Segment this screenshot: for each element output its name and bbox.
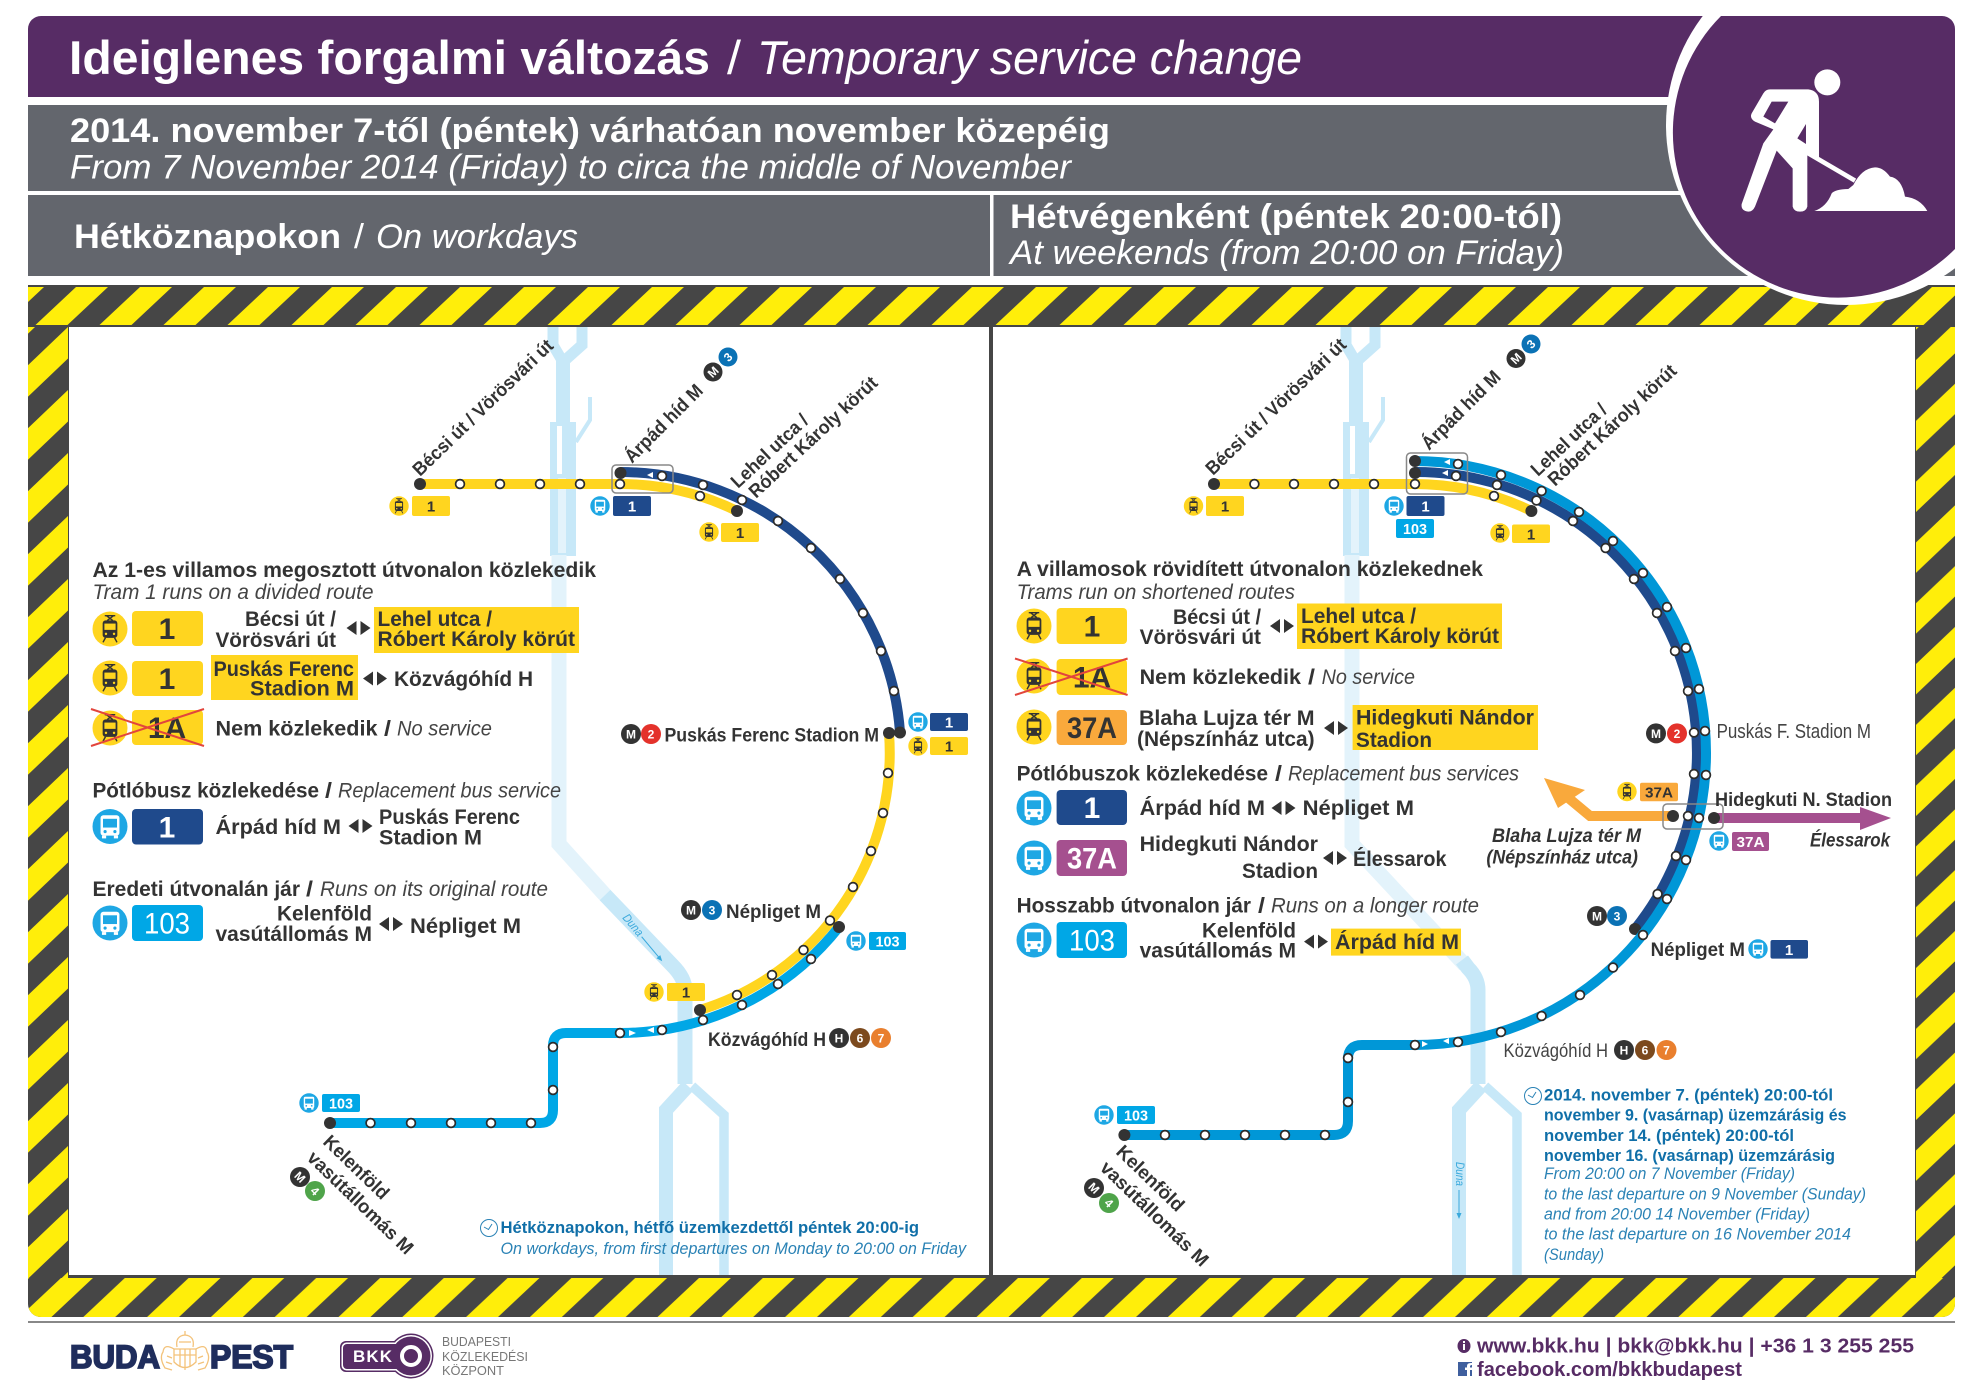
contact info: [1458, 1336, 1914, 1381]
legend row: tram 37A: [1016, 705, 1538, 752]
weekend heading band: Hétvégenként (péntek 20:00-tól): [1010, 198, 1562, 236]
legend row: bus 103 left: Kelenföld: [277, 902, 372, 926]
legend row: tram 1 Puskás to Közvágóhíd: 1: [159, 663, 175, 696]
footer rule: [28, 1321, 1955, 1323]
note: weekend validity: [1524, 1086, 1866, 1264]
tag: bus 37A: [1709, 831, 1769, 851]
tag: bus 103 Kelenföld: [299, 1093, 360, 1113]
label: Duna: [620, 911, 668, 965]
date English: From 7 November 2014 (Friday) to circa the middle of November: [70, 149, 1073, 187]
legend row: tram 1A no service right: /: [1308, 666, 1315, 689]
legend row: tram 1 Bécsi út to Lehel utca: [92, 607, 579, 653]
logo: Budapest: PEST: [210, 1339, 293, 1375]
legend: left replacement bus heading: Replacement bus service: [338, 780, 561, 802]
legend: right tram heading: [1017, 558, 1483, 604]
tag: bus 1 Árpád híd: 1: [628, 498, 636, 516]
legend row: tram 1A no service: Nem közlekedik: [216, 718, 378, 741]
legend row: tram 1 right: Róbert Károly körút: [1301, 625, 1499, 648]
label: Közvágóhíd right: H: [1620, 1044, 1628, 1058]
label: Népliget left: Népliget M: [726, 902, 821, 923]
icon: metro 4 Kelenföld left: M: [291, 1169, 308, 1186]
label: Árpád híd right: Árpád híd M: [1417, 366, 1505, 455]
label: Puskás Ferenc Stadion: M: [626, 728, 636, 742]
label: Élessarok: Élessarok: [1810, 830, 1891, 852]
legend: left tram heading: Tram 1 runs on a divided route: [92, 581, 374, 604]
legend row: tram 1 Bécsi út to Lehel utca: 1: [159, 613, 175, 646]
note: weekend validity: november 14. (péntek) 20:00-tól: [1544, 1126, 1794, 1145]
icon: metro 3 Árpád híd right: [1506, 334, 1540, 368]
label: Blaha Lujza tér: [1486, 826, 1642, 869]
tag: bus 103 Kelenföld right: [1094, 1105, 1155, 1125]
legend row: bus 1 right: [1016, 790, 1414, 826]
icon: crest: [161, 1331, 209, 1370]
label: Népliget left: [681, 900, 821, 923]
left map: tram 1 southern section: [694, 505, 895, 1016]
tag: bus 103 Kelenföld: 103: [329, 1096, 353, 1112]
label: Puskás Ferenc Stadion: 2: [648, 728, 655, 742]
legend row: bus 1: Árpád híd M: [216, 816, 341, 839]
workday heading band: Hétköznapokon: [74, 218, 341, 256]
icon: metro 4 Kelenföld right: 4: [1102, 1196, 1116, 1211]
label: Lehel utca left: Lehel utca /: [727, 410, 814, 493]
right map: river Danube: [1343, 327, 1517, 1275]
legend row: tram 1 Puskás to Közvágóhíd: Közvágóhíd H: [394, 668, 533, 691]
legend: left replacement bus heading: /: [325, 780, 332, 802]
legend row: bus 1 right: Árpád híd M: [1140, 797, 1265, 820]
tag: tram 1 Puskás: [908, 736, 968, 756]
left map: tram 1 northern section: [414, 478, 737, 511]
tag: tram 1 Puskás: 1: [945, 738, 953, 756]
label: Közvágóhíd left: H: [835, 1032, 843, 1046]
note: weekend validity: 2014. november 7. (péntek) 20:00-tól: [1544, 1086, 1833, 1104]
legend row: bus 1 right: 1: [1084, 792, 1100, 825]
legend row: bus 37A: [1016, 833, 1447, 883]
legend row: tram 1A no service right: 1A: [1073, 662, 1111, 694]
right map: arrow to Blaha Lujza tér: [1544, 778, 1673, 816]
legend row: tram 1 Puskás to Közvágóhíd: Stadion M: [250, 678, 354, 700]
legend row: bus 1 right: Népliget M: [1303, 797, 1414, 820]
legend row: tram 1 right: Bécsi út /: [1173, 606, 1261, 629]
legend row: bus 1: Puskás Ferenc: [379, 806, 520, 829]
label: Közvágóhíd right: Közvágóhíd H: [1504, 1041, 1608, 1062]
tag: tram 1 Közvágóhíd: 1: [682, 984, 690, 1002]
label: Lehel utca left: Róbert Károly körút: [745, 372, 883, 503]
label: Közvágóhíd left: 7: [878, 1032, 885, 1046]
label: Bécsi út left: Bécsi út / Vörösvári út: [409, 335, 558, 481]
note: weekend validity: to the last departure on 9 November (Sunday): [1544, 1184, 1866, 1203]
logo: BKK: [340, 1334, 434, 1378]
note: weekend validity: (Sunday): [1544, 1245, 1604, 1264]
legend row: tram 1A no service: 1A: [148, 712, 186, 745]
legend: right replacement bus heading: /: [1275, 762, 1282, 785]
contact info: facebook.com/bkkbudapest: [1477, 1359, 1742, 1381]
title separator: /: [727, 31, 742, 84]
legend: left original route heading: Runs on its original route: [320, 878, 548, 901]
icon: metro 3 Árpád híd left: M: [705, 364, 722, 381]
title Hungarian: Ideiglenes forgalmi változás: [69, 31, 710, 84]
label: Puskás F. Stadion: [1646, 721, 1871, 743]
legend: right replacement bus heading: Replacement bus services: [1288, 762, 1519, 785]
label: Lehel utca right: Róbert Károly körút: [1544, 360, 1682, 491]
label: Népliget right: Népliget M: [1651, 940, 1745, 961]
note: weekend validity: november 16. (vasárnap) üzemzárásig: [1544, 1146, 1835, 1165]
header band: title: [28, 16, 1955, 97]
legend row: bus 1: [92, 806, 520, 850]
legend row: tram 1A no service: No service: [397, 718, 492, 741]
label: Lehel utca right: Lehel utca /: [1527, 399, 1612, 481]
legend: left original route heading: [92, 878, 548, 901]
icon: worker shoveling: [1742, 69, 1927, 212]
left map: river Danube: [550, 327, 724, 1275]
right map: bus 103 extended line: [1118, 455, 1710, 1141]
label: Blaha Lujza tér: Blaha Lujza tér M: [1492, 826, 1642, 847]
legend: left tram heading: [92, 559, 596, 604]
tag: tram 37A: 37A: [1645, 784, 1673, 802]
text: BKK full name: KÖZLEKEDÉSI: [442, 1349, 528, 1364]
text: BKK full name: BUDAPESTI: [442, 1334, 511, 1349]
date Hungarian: 2014. november 7-től (péntek) várhatóan november közepéig: [70, 112, 1110, 150]
legend: left replacement bus heading: Pótlóbusz közlekedése: [92, 780, 319, 802]
legend row: tram 37A: 37A: [1067, 712, 1117, 745]
tag: bus 103 Népliget: [846, 931, 906, 951]
tag: bus 103 Kelenföld right: 103: [1124, 1108, 1148, 1124]
label: Közvágóhíd left: [708, 1028, 891, 1051]
label: Népliget right: 3: [1614, 910, 1621, 924]
tag: bus 1 Árpád híd: [590, 496, 651, 516]
hazard stripe frame: [28, 285, 1955, 1317]
tag: tram 1 Lehel utca: [699, 522, 759, 542]
tag: tram 1 Lehel utca: 1: [736, 525, 744, 542]
right map: tram 1 line: [1208, 478, 1531, 511]
icon: metro 4 Kelenföld right: M: [1085, 1180, 1102, 1197]
legend: right longer route heading: Runs on a longer route: [1271, 894, 1479, 918]
icon: metro 3 Árpád híd right: 3: [1524, 337, 1539, 351]
label: Közvágóhíd right: 7: [1663, 1044, 1670, 1058]
icon: metro 3 Árpád híd right: M: [1508, 350, 1525, 367]
weekend heading band: [994, 195, 1955, 276]
title English: Temporary service change: [757, 31, 1302, 84]
legend row: bus 103 left: Népliget M: [410, 915, 521, 938]
label: Kelenföld right: Kelenföld: [1112, 1141, 1188, 1216]
tag: bus 1 Puskás: 1: [945, 714, 953, 732]
tag: bus 37A: 37A: [1736, 834, 1765, 851]
legend row: tram 37A: (Népszínház utca): [1137, 728, 1315, 751]
legend row: tram 1 Bécsi út to Lehel utca: Róbert Károly körút: [378, 628, 575, 651]
label: Puskás F. Stadion: Puskás F. Stadion M: [1717, 721, 1871, 743]
legend row: bus 1: 1: [159, 812, 175, 844]
label: Kelenföld left: vasútállomás M: [303, 1147, 417, 1259]
legend: right tram heading: Trams run on shortened routes: [1017, 581, 1295, 604]
contact info: www.bkk.hu | bkk@bkk.hu | +36 1 3 255 255: [1476, 1336, 1914, 1358]
tag: tram 37A: [1617, 782, 1678, 802]
left map: replacement bus 1 line: [614, 467, 906, 738]
logo: Budapest: BUDA: [70, 1339, 160, 1375]
tag: tram 1 Közvágóhíd: [644, 982, 705, 1002]
note: weekend validity: november 9. (vasárnap) üzemzárásig és: [1544, 1106, 1846, 1125]
legend: right longer route heading: Hosszabb útvonalon jár: [1017, 894, 1251, 918]
text: BKK full name: KÖZPONT: [442, 1363, 504, 1378]
legend: right longer route heading: [1017, 894, 1479, 918]
legend: right longer route heading: /: [1258, 894, 1265, 918]
text: BKK full name: [442, 1334, 528, 1378]
label: Közvágóhíd left: Közvágóhíd H: [708, 1030, 826, 1051]
legend row: bus 37A: Hidegkuti Nándor: [1140, 833, 1318, 856]
panel: weekends: [993, 327, 1915, 1275]
legend row: bus 37A: Élessarok: [1353, 848, 1447, 871]
right map: transfer box stadion: [1663, 804, 1723, 829]
tag: bus 1 and 103 Árpád híd right: 1: [1421, 498, 1430, 516]
legend row: bus 103 right: Kelenföld: [1202, 920, 1296, 942]
label: Puskás Ferenc Stadion: Puskás Ferenc Stadion M: [664, 726, 879, 746]
note: workday validity: Hétköznapokon, hétfő üzemkezdettől péntek 20:00-ig: [500, 1218, 919, 1237]
label: Népliget right: [1587, 906, 1808, 961]
legend row: tram 37A: Hidegkuti Nándor: [1356, 706, 1534, 730]
legend row: tram 1A no service right: Nem közlekedik: [1140, 666, 1301, 689]
date band: [28, 105, 1955, 191]
legend row: tram 1A no service right: [1015, 658, 1415, 695]
legend row: bus 37A: 37A: [1067, 842, 1117, 876]
panel: workdays: [69, 327, 989, 1275]
right map: transfer box north: [1406, 453, 1468, 494]
icon: facebook: [1458, 1362, 1472, 1376]
tag: tram 1 Lehel utca right: [1490, 523, 1550, 544]
label: Népliget right: M: [1592, 910, 1602, 924]
workday heading band: On workdays: [376, 218, 578, 256]
workday heading band: [28, 195, 990, 276]
label: Bécsi út right: Bécsi út / Vörösvári út: [1202, 334, 1351, 480]
legend row: tram 1 Bécsi út to Lehel utca: Bécsi út /: [245, 608, 336, 631]
note: weekend validity: From 20:00 on 7 November (Friday): [1544, 1164, 1795, 1183]
tag: bus 1 and 103 Árpád híd right: 103: [1403, 521, 1427, 538]
logo: BKK: BKK: [353, 1347, 393, 1366]
legend row: tram 1 Puskás to Közvágóhíd: Puskás Ferenc: [214, 658, 354, 681]
legend row: bus 37A: Stadion: [1242, 860, 1318, 883]
icon: metro 3 Árpád híd left: 3: [721, 350, 736, 364]
icon: info: [1458, 1339, 1470, 1353]
left map: bus 103 line: [324, 921, 845, 1129]
tag: tram 1 Bécsi út right: [1184, 496, 1244, 516]
label: Közvágóhíd left: 6: [857, 1032, 864, 1046]
legend row: tram 1 Bécsi út to Lehel utca: Lehel utca /: [378, 608, 492, 631]
workday heading band: /: [354, 218, 364, 256]
legend: left tram heading: Az 1-es villamos megosztott útvonalon közlekedik: [92, 559, 596, 582]
legend: right replacement bus heading: [1017, 762, 1519, 785]
legend row: bus 1: Stadion M: [379, 826, 482, 850]
legend row: tram 1 right: [1016, 604, 1502, 649]
label: Duna: Duna: [620, 911, 647, 939]
right map: arrow to Élessarok: [1714, 807, 1891, 830]
label: Kelenföld left: Kelenföld: [319, 1131, 393, 1204]
right map: terminus dots: [1525, 505, 1720, 824]
label: Duna right: Duna: [1453, 1162, 1467, 1186]
left map: transfer box: [612, 465, 673, 493]
legend row: tram 1 Puskás to Közvágóhíd: [92, 655, 533, 700]
legend row: tram 1A no service: /: [384, 718, 391, 741]
legend row: bus 103 left: [92, 902, 521, 946]
label: Népliget left: M: [686, 904, 696, 918]
weekend heading band: At weekends (from 20:00 on Friday): [1008, 234, 1564, 272]
legend row: bus 103 right: [1016, 920, 1461, 963]
label: Közvágóhíd right: 6: [1642, 1044, 1649, 1058]
legend: right tram heading: A villamosok rövidített útvonalon közlekednek: [1017, 558, 1483, 581]
label: Árpád híd left: Árpád híd M: [620, 380, 708, 468]
right map: replacement bus 1 line: [1409, 467, 1698, 935]
label: Kelenföld right: vasútállomás M: [1096, 1157, 1212, 1271]
tag: bus 1 and 103 Árpád híd right: [1384, 496, 1444, 538]
note: weekend validity: and from 20:00 14 November (Friday): [1544, 1204, 1810, 1224]
icon: metro 4 Kelenföld left: 4: [308, 1184, 322, 1199]
legend row: bus 103 right: 103: [1069, 924, 1115, 958]
label: Közvágóhíd right: [1504, 1040, 1676, 1062]
note: weekend validity: to the last departure on 16 November 2014: [1544, 1225, 1851, 1244]
tag: tram 1 Bécsi út: 1: [427, 498, 435, 516]
tag: bus 1 Puskás: [908, 712, 968, 732]
legend row: tram 37A: Stadion: [1356, 729, 1432, 752]
legend row: tram 37A: Blaha Lujza tér M: [1139, 707, 1315, 730]
label: Duna right: [1453, 1162, 1467, 1219]
label: Puskás F. Stadion: 2: [1674, 727, 1681, 741]
legend row: tram 1 right: Lehel utca /: [1301, 605, 1416, 628]
legend: left original route heading: Eredeti útvonalán jár: [92, 878, 300, 901]
label: Hidegkuti N. Stadion: Hidegkuti N. Stadion: [1715, 790, 1892, 811]
logo: Budapest: [70, 1331, 293, 1375]
note: workday validity: [480, 1218, 967, 1258]
legend row: bus 103 left: vasútállomás M: [216, 923, 372, 946]
tag: bus 103 Népliget: 103: [876, 934, 900, 950]
label: Népliget left: 3: [709, 904, 716, 918]
label: Puskás F. Stadion: M: [1651, 727, 1661, 741]
legend row: tram 1 right: Vörösvári út: [1140, 626, 1261, 649]
label: Népliget right: 1: [1785, 942, 1793, 959]
legend: right replacement bus heading: Pótlóbuszok közlekedése: [1017, 762, 1268, 785]
legend row: tram 1A no service right: No service: [1322, 666, 1415, 689]
tag: tram 1 Lehel utca right: 1: [1527, 526, 1535, 544]
legend row: tram 1A no service: [91, 709, 492, 746]
icon: metro 3 Árpád híd left: [704, 348, 738, 382]
legend row: tram 1 right: 1: [1084, 610, 1100, 644]
icon: metro 4 Kelenföld left: [290, 1167, 325, 1201]
label: Blaha Lujza tér: (Népszínház utca): [1486, 848, 1638, 869]
note: workday validity: On workdays, from first departures on Monday to 20:00 on Friday: [500, 1239, 967, 1258]
legend row: bus 103 left: 103: [144, 908, 190, 940]
legend row: bus 103 right: Árpád híd M: [1335, 931, 1459, 954]
legend: left replacement bus heading: [92, 780, 561, 802]
icon: metro 4 Kelenföld right: [1084, 1178, 1119, 1213]
tag: tram 1 Bécsi út right: 1: [1221, 498, 1229, 516]
legend row: tram 1 Bécsi út to Lehel utca: Vörösvári út: [216, 629, 336, 652]
tag: tram 1 Bécsi út: [389, 496, 450, 516]
legend: left original route heading: /: [306, 878, 313, 901]
roadworks badge: [1666, 16, 1955, 305]
legend row: bus 103 right: vasútállomás M: [1140, 940, 1296, 963]
